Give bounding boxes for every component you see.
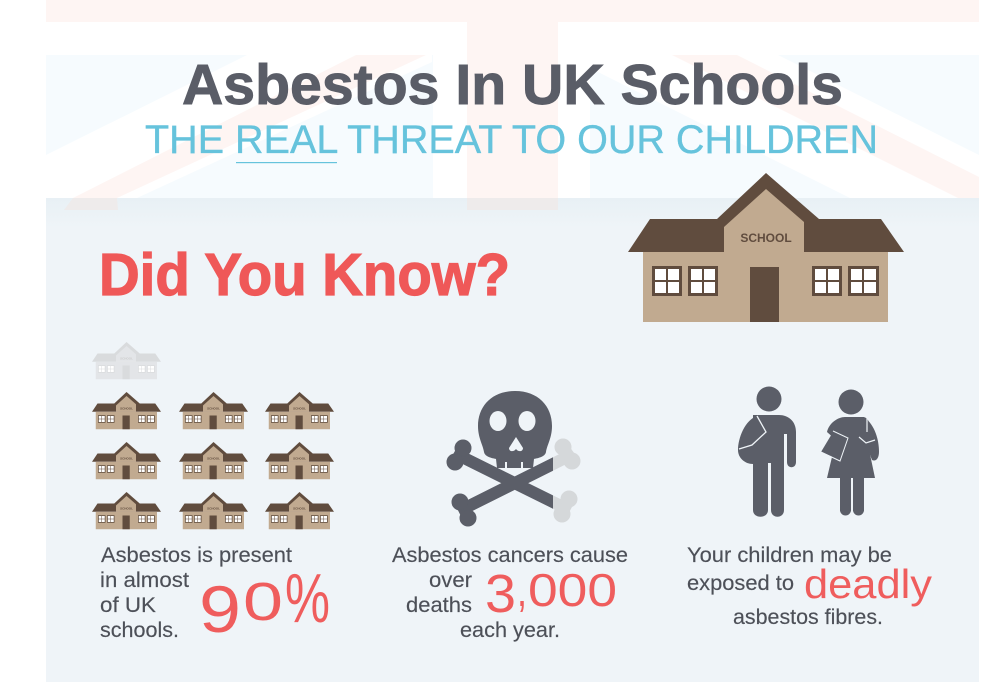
icon: school row 2 col 1 bbox=[92, 442, 161, 479]
text block: deadly fibres: asbestos fibres. bbox=[733, 606, 883, 629]
icon: school row 2 col 3: SCHOOL bbox=[293, 456, 306, 460]
statistic: 3,000: , bbox=[517, 564, 527, 616]
icon: school row 1 col 3 bbox=[265, 392, 334, 429]
icon: boy with backpack bbox=[738, 386, 796, 517]
text block: 90 percent: of UK bbox=[100, 594, 156, 617]
icon: large school: SCHOOL bbox=[740, 231, 792, 245]
icon: faded school: SCHOOL bbox=[120, 356, 133, 360]
icon: skull and crossbones bbox=[447, 391, 580, 526]
icon: school row 1 col 2: SCHOOL bbox=[207, 406, 220, 410]
icon: school row 1 col 2 bbox=[179, 392, 248, 429]
text block: 3,000 deaths: each year. bbox=[460, 619, 560, 642]
icon: large school bbox=[628, 173, 904, 322]
statistic: 3,000: 000 bbox=[528, 564, 617, 616]
statistic: 3,000 bbox=[485, 564, 617, 624]
statistic: 90%: 9 bbox=[199, 572, 241, 646]
icon: school row 2 col 3 bbox=[265, 442, 334, 479]
text block: 90 percent: Asbestos is present bbox=[101, 544, 292, 567]
text block: 90 percent: in almost bbox=[100, 569, 189, 592]
icon: girl with book and backpack bbox=[821, 390, 879, 516]
heading: did you know: Did You Know? bbox=[99, 242, 510, 308]
statistic: 3,000: 3 bbox=[485, 564, 516, 624]
text block: 3,000 deaths bbox=[392, 544, 628, 642]
icon: school row 2 col 2 bbox=[179, 442, 248, 479]
text block: 90 percent bbox=[100, 544, 330, 646]
icon: school row 3 col 1 bbox=[92, 492, 161, 529]
title: Asbestos In UK Schools bbox=[182, 53, 843, 117]
icon: school row 1 col 3: SCHOOL bbox=[293, 406, 306, 410]
icon: school row 1 col 1 bbox=[92, 392, 161, 429]
highlighted word: deadly: deadly bbox=[804, 561, 933, 607]
text block: deadly fibres bbox=[687, 544, 933, 629]
icon: school row 3 col 2: SCHOOL bbox=[207, 506, 220, 510]
text block: 3,000 deaths: over bbox=[429, 569, 472, 592]
text block: 3,000 deaths: deaths bbox=[406, 594, 472, 617]
subtitle underline bbox=[236, 162, 337, 163]
icon: faded school bbox=[92, 342, 161, 379]
icon: school row 2 col 2: SCHOOL bbox=[207, 456, 220, 460]
text block: 3,000 deaths: Asbestos cancers cause bbox=[392, 544, 628, 567]
statistic: 90%: 0 bbox=[243, 572, 283, 632]
text block: 90 percent: schools. bbox=[100, 619, 179, 642]
icon: school row 3 col 1: SCHOOL bbox=[120, 506, 133, 510]
icon grid: ten schools, one in ten faded bbox=[92, 342, 334, 529]
icon: school row 2 col 1: SCHOOL bbox=[120, 456, 133, 460]
statistic: 90%: % bbox=[285, 559, 330, 637]
icon: school row 3 col 3 bbox=[265, 492, 334, 529]
icon: school row 3 col 3: SCHOOL bbox=[293, 506, 306, 510]
subtitle: THE REAL THREAT TO OUR CHILDREN bbox=[145, 118, 878, 162]
icon: school row 1 col 1: SCHOOL bbox=[120, 406, 133, 410]
text block: deadly fibres: Your children may be bbox=[687, 544, 892, 567]
icon: school row 3 col 2 bbox=[179, 492, 248, 529]
text block: deadly fibres: exposed to bbox=[687, 572, 794, 595]
statistic: 90% bbox=[199, 559, 330, 646]
